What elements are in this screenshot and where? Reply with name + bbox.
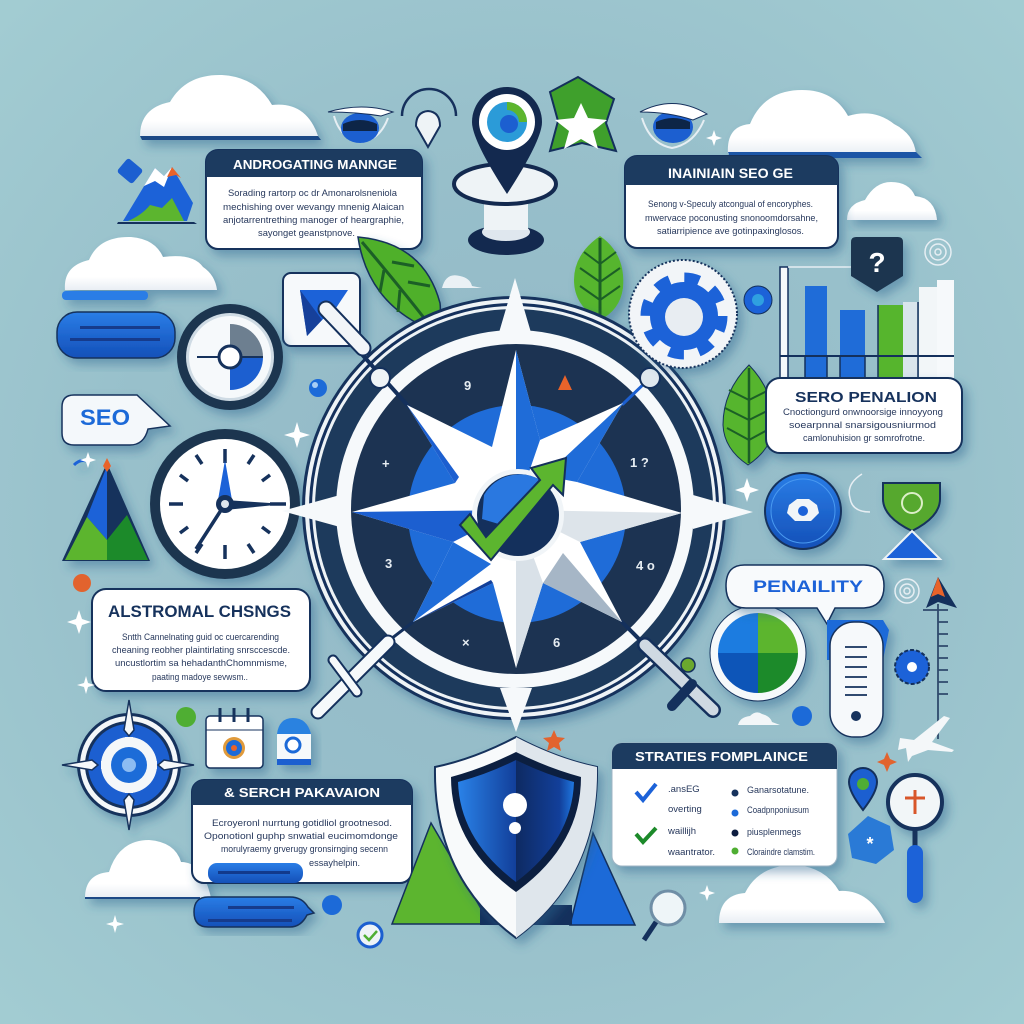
icon: airplane [898, 716, 954, 762]
compass [282, 278, 753, 732]
icon: green leaf center right [574, 236, 623, 320]
body text: soearpnnal snarsigousniurmod [789, 420, 936, 431]
icon: orange star small [877, 752, 897, 772]
cloud: right small [847, 182, 937, 220]
icon: question badge [851, 237, 903, 292]
compass numerals: × [462, 635, 470, 650]
body text: mwervace poconusting snonoomdorsahne, [645, 213, 818, 224]
icon: pie dial [177, 304, 283, 410]
checklist left: .ansEG [668, 784, 700, 795]
compass outer rings [302, 296, 726, 720]
compass center hub and check [460, 458, 566, 561]
icon: small gear right [895, 650, 929, 684]
compass numerals [382, 375, 655, 650]
icon: red star [543, 730, 565, 751]
heading: ALSTROMAL CHSNGS [108, 602, 291, 621]
icon: shield with tents [392, 737, 635, 938]
icon: blue chat pill lower [194, 897, 314, 927]
panel: androgating manange [206, 150, 422, 249]
icon: blue dot panel [322, 895, 342, 915]
panel: inainiain seo ge [625, 156, 838, 248]
compass numerals: 4 o [636, 558, 655, 573]
compass numerals: 9 [464, 378, 471, 393]
body text: paating madoye sevwsm.. [152, 672, 248, 683]
body text: satiarripience ave gotinpaxinglosos. [657, 226, 804, 237]
checklist left: waantrator. [667, 847, 715, 858]
icon: magnifier center [644, 891, 685, 940]
tent blue [570, 833, 635, 925]
checklist right: Coadpnponiusum [747, 805, 809, 816]
icon: blue chat pill top [57, 312, 175, 358]
icon: spiral small [895, 579, 919, 603]
compass blue disc [408, 405, 626, 623]
speech bubble: SEO: SEO [80, 405, 130, 430]
icon: small hat cloud [442, 275, 482, 288]
icon: blue gear button [765, 473, 841, 549]
body text: morulyraemy grverugy gronsirnging secenn [221, 844, 388, 855]
icon: mini compass [62, 700, 194, 830]
body text [223, 188, 404, 239]
checklist left: waillijh [667, 826, 696, 837]
body text: camlonuhision gr somrofrotne. [803, 433, 925, 444]
cloud: bottom left [85, 840, 211, 899]
body text: Sorading rartorp oc dr Amonarolsneniola [228, 188, 398, 199]
body text [645, 199, 818, 237]
icon: up arrow ruler [923, 577, 957, 739]
icon: green dot [176, 707, 196, 727]
heading: SERO PENALION [795, 389, 937, 406]
body text [112, 632, 290, 683]
icon: camera square [277, 718, 311, 765]
speech bubble: SEO [62, 395, 170, 445]
heading: STRATIES FOMPLAINCE [635, 749, 808, 764]
icon: spiral [925, 239, 951, 265]
icon: split pie [710, 605, 806, 701]
checklist left: overting [668, 804, 702, 815]
icon: small pin [849, 768, 877, 810]
icon: gear [629, 260, 737, 368]
decorative sparkles [67, 130, 759, 933]
heading: & SERCH PAKAVAION [224, 785, 380, 800]
checklist right: Ganarsotatune. [747, 785, 809, 796]
speech bubble: penaility: PENAILITY [753, 577, 864, 596]
heading: INAINIAIN SEO GE [668, 166, 793, 181]
icon: blue chat pill bottom [208, 863, 303, 883]
panel: strategies compliance [612, 743, 837, 866]
body text [204, 818, 398, 869]
icon: green dot compass [681, 658, 695, 672]
compass arms [318, 309, 713, 712]
cloud: top right [728, 90, 922, 158]
icon: calendar [206, 708, 263, 768]
body text: cheaning reobher plaintirlating snrsccescde. [112, 645, 290, 656]
icon: device card [827, 620, 889, 737]
tent green [392, 823, 490, 924]
icon: outline pin [402, 89, 456, 147]
cloud: bottom right [719, 865, 885, 923]
icon: leaf right [723, 365, 774, 465]
icon: mini cloud [738, 712, 780, 725]
icon: green leaf center left [358, 237, 440, 331]
body text: Sntth Cannelnating guid oc cuercarending [122, 632, 279, 643]
body text: Senong v-Speculy atcongual of encoryphes. [648, 199, 813, 210]
icon: small badge check [358, 923, 382, 947]
panel: alstromal changs [92, 589, 310, 691]
body text: essayhelpin. [309, 858, 360, 869]
body text: mechishing over wevangy mnenig Alaican [223, 202, 404, 213]
icon: location pin on pedestal [454, 87, 556, 255]
body text: Oponotionl guphp snwatial eucimomdonge [204, 831, 398, 842]
compass numerals: 6 [553, 635, 560, 650]
body text: Cnoctiongurd onwnoorsige innoyyong [783, 407, 943, 418]
icon: clock [150, 429, 300, 579]
icon: mountain top left [117, 158, 197, 224]
compass numerals: 1 ? [630, 455, 649, 470]
icon: small curve [849, 474, 870, 512]
checklist left [636, 784, 715, 858]
compass numerals: + [382, 456, 390, 471]
body text [783, 407, 943, 444]
compass numerals: 3 [385, 556, 392, 571]
icon: blue dot small [792, 706, 812, 726]
icon: triangle mountain [62, 458, 150, 561]
compass outer spikes [282, 278, 753, 732]
icon: orange ball [73, 574, 91, 592]
icon: small blue target [744, 286, 772, 314]
icon: small blue dot [309, 379, 327, 397]
speech bubble: penaility [726, 565, 884, 624]
panel: search pakavaion [192, 780, 412, 883]
icon: eye right [640, 103, 707, 148]
bar chart [780, 267, 954, 378]
icon: blue hexagon star [848, 816, 894, 864]
icon: blue arrow button [283, 273, 360, 346]
cloud: top left [140, 75, 321, 140]
panel: sero penalion [766, 378, 962, 453]
heading: ANDROGATING MANNGE [233, 157, 397, 172]
icon: eye left [328, 107, 393, 143]
compass star [352, 350, 682, 668]
cloud: left middle [62, 237, 217, 300]
icon: hourglass [883, 483, 940, 559]
body text: Ecroyeronl nurrtung gotidliol grootnesod. [212, 818, 392, 829]
checklist right: piusplenmegs [747, 827, 801, 838]
body text: uncustlortim sa hehadanthChomnmisme, [115, 658, 287, 669]
icon: green star badge [550, 77, 616, 151]
icon: magnifier right [888, 775, 942, 903]
checklist right [732, 785, 815, 858]
body text: sayonget geanstpnove. [258, 228, 355, 239]
body text: anjotarrentrething manoger of heargraphie, [223, 215, 404, 226]
icon: blue hexagon star: * [866, 834, 874, 854]
checklist right: Cloraindre clamstim. [747, 847, 815, 858]
icon: question badge: ? [868, 247, 886, 278]
